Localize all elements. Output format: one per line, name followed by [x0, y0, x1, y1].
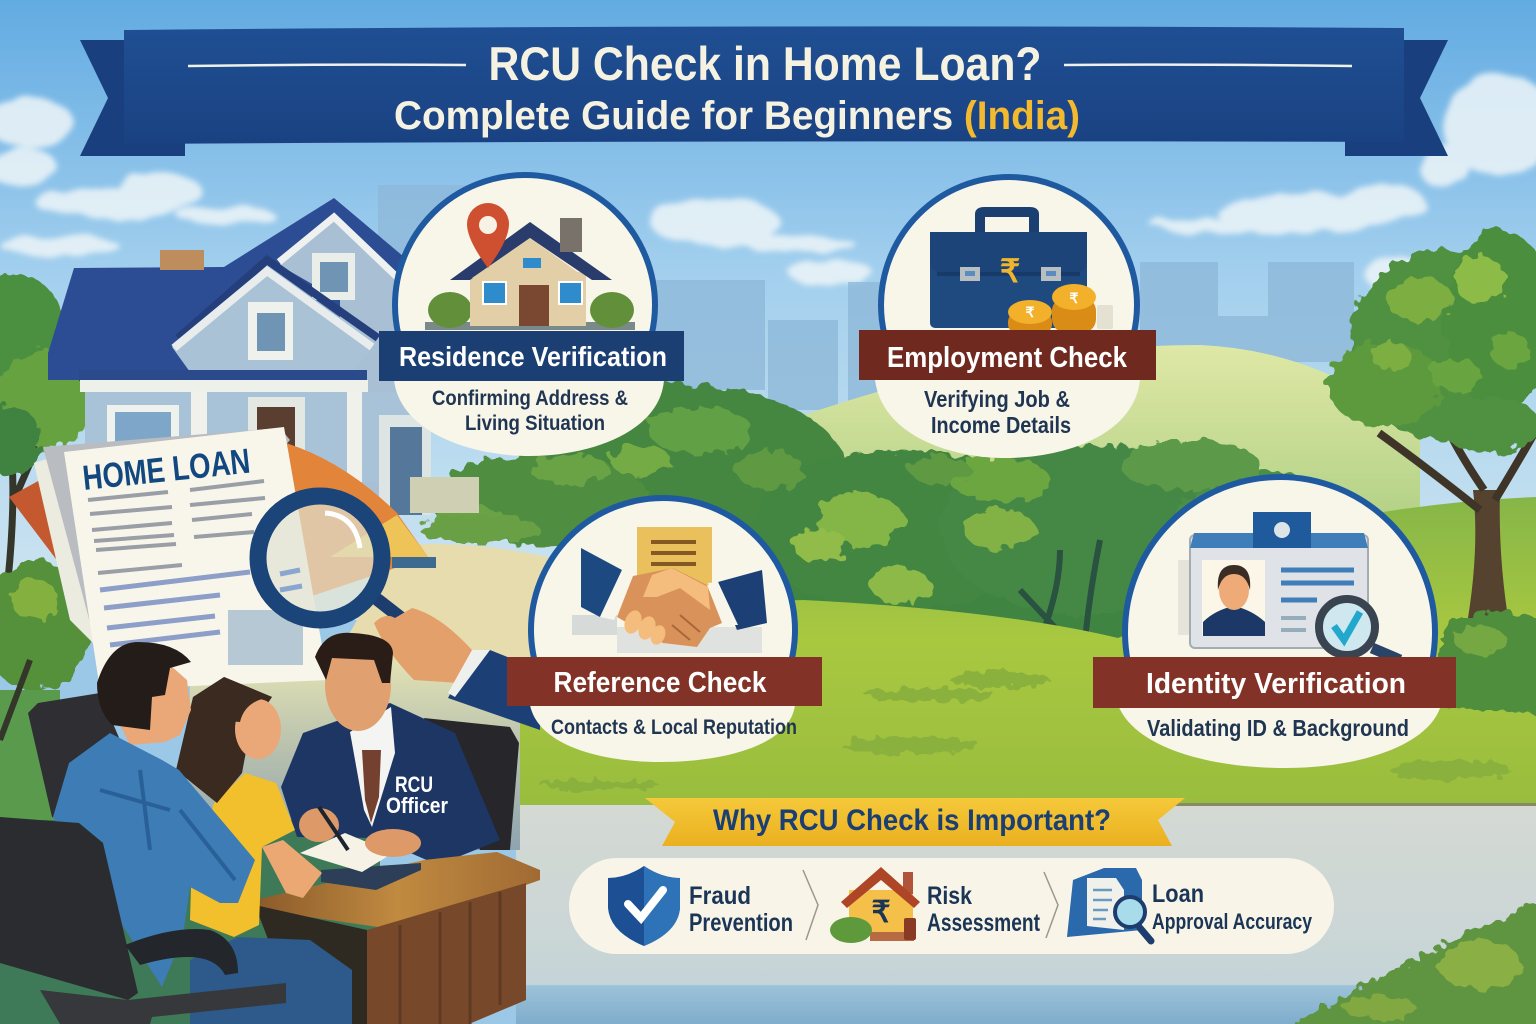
circle badge: [878, 174, 1140, 330]
description: Income Details: [931, 412, 1071, 438]
hand holding magnifier: [374, 608, 472, 683]
heading: Reference Check: [554, 667, 767, 699]
document title: HOME LOAN: [81, 442, 252, 498]
description: Verifying Job &: [924, 386, 1070, 412]
distant city buildings: [378, 185, 1354, 410]
heading: Residence Verification: [399, 341, 667, 372]
folder and papers: [321, 863, 421, 890]
heading ribbon: [859, 330, 1156, 380]
section heading: Why RCU Check is Important?: [713, 804, 1111, 837]
back chair: [28, 693, 120, 820]
front chair: [0, 817, 138, 1000]
title line 1: RCU Check in Home Loan?: [488, 37, 1042, 90]
heading ribbon: [507, 657, 822, 706]
heading ribbon: [1093, 657, 1456, 708]
panel: employment check: [859, 177, 1156, 458]
house: [48, 198, 479, 515]
woman: [190, 773, 295, 937]
benefit: risk assessment: Risk: [927, 882, 972, 910]
meadow grass patches: [540, 672, 1510, 790]
circle badge: [528, 495, 798, 657]
benefit: risk assessment: Assessment: [927, 909, 1041, 937]
clouds: [0, 73, 1536, 295]
icon: shield: [608, 866, 680, 946]
icon: house with pin: [425, 203, 635, 330]
scene: officer and couple at desk: [0, 633, 540, 1024]
heading: Employment Check: [887, 342, 1128, 374]
icon: house with rupee: [830, 867, 920, 943]
benefit: loan approval accuracy: Approval Accuracy: [1152, 909, 1313, 934]
gold ribbon: [645, 798, 1185, 846]
tree line: [430, 385, 1350, 660]
icon: briefcase with coins: ₹: [1026, 304, 1035, 320]
label: RCU Officer: RCU: [395, 772, 433, 797]
icon: magnifying glass: [258, 496, 414, 628]
title banner: [80, 26, 1448, 156]
ground under the seated figures: [0, 820, 380, 1024]
description: Living Situation: [465, 412, 605, 435]
man: [120, 665, 191, 745]
section: why RCU check is important: [569, 798, 1334, 954]
icon: handshake: [572, 527, 767, 653]
left trees: [0, 275, 95, 1024]
far hill: [790, 345, 1420, 560]
icon: house with rupee: ₹: [871, 896, 891, 929]
benefits pill: [569, 858, 1334, 954]
banner tails: [80, 40, 185, 156]
lower card: [875, 380, 1140, 458]
circle badge: [1122, 474, 1438, 657]
benefit: fraud prevention: Prevention: [689, 909, 793, 937]
panel: identity verification: [1093, 477, 1456, 787]
officer sleeve: [448, 650, 540, 730]
road: [516, 805, 1536, 1024]
description: Contacts & Local Reputation: [551, 716, 797, 739]
shrubs near house: [420, 516, 540, 544]
path and yard behind desk: [300, 544, 560, 720]
icon: briefcase with coins: ₹: [1000, 253, 1020, 289]
icon: id card with check: [1178, 512, 1400, 660]
circle badge: [392, 172, 658, 331]
title line 2: Complete Guide for Beginners (India): [394, 94, 1080, 138]
benefit: fraud prevention: Fraud: [689, 882, 751, 910]
background sky: [0, 0, 1536, 620]
desk: [255, 852, 540, 930]
officer: [281, 703, 500, 865]
lower card: [394, 380, 664, 456]
icon: documents with magnifier: [1067, 868, 1151, 941]
bottom right bush: [1280, 900, 1536, 1024]
banner body: [124, 26, 1404, 144]
panel: residence verification: [379, 175, 684, 456]
panel: reference check: [507, 498, 822, 762]
description: Confirming Address &: [432, 387, 628, 410]
label: RCU Officer: Officer: [386, 793, 448, 818]
lower card: [530, 705, 795, 762]
panel: home loan document with magnifier: [9, 427, 540, 730]
icon: briefcase with coins: ₹: [1070, 290, 1079, 306]
benefit: loan approval accuracy: Loan: [1152, 880, 1204, 908]
lower card: [1118, 705, 1441, 768]
officer chair: [424, 718, 519, 850]
description: Validating ID & Background: [1147, 715, 1409, 741]
right tree: [1327, 230, 1536, 715]
heading ribbon: [379, 331, 684, 381]
heading: Identity Verification: [1146, 668, 1406, 700]
meadow: [470, 497, 1536, 815]
icon: briefcase with coins: [930, 212, 1113, 334]
